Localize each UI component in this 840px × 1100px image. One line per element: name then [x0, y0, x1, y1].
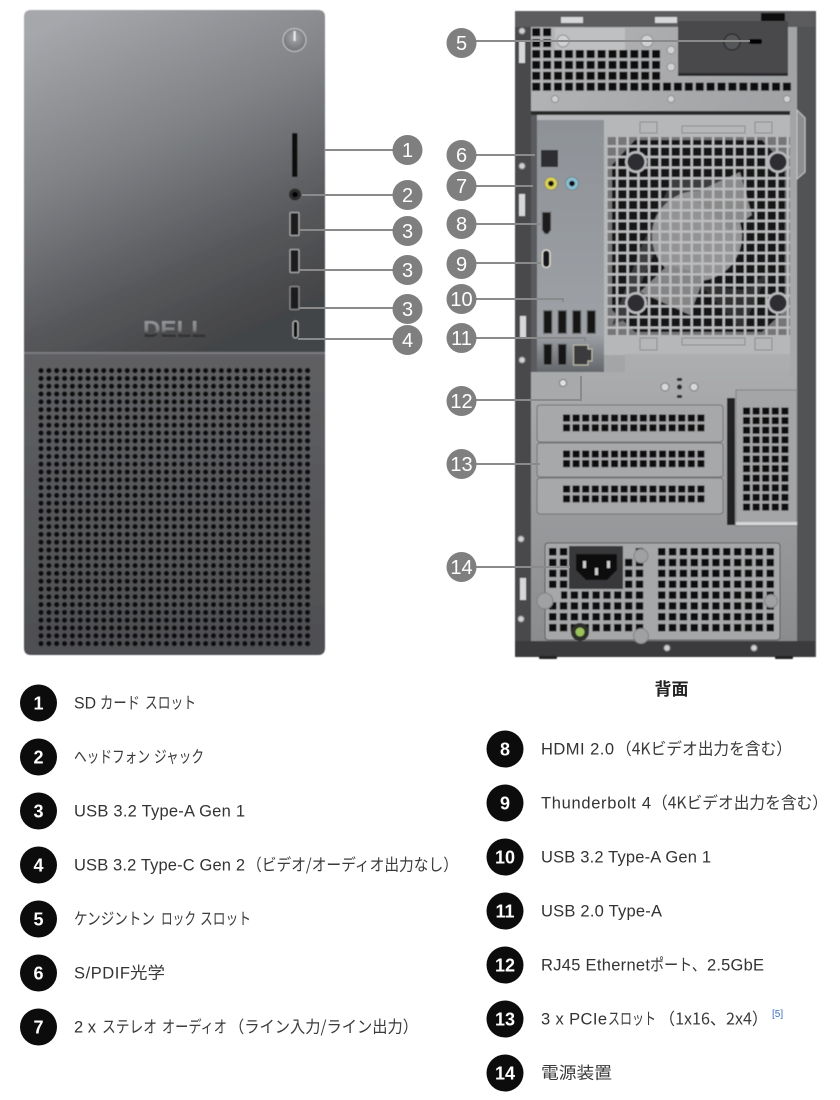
legend item 13: スロット — [608, 1006, 656, 1030]
callout 2 — [392, 180, 422, 210]
callout 13: 13 — [450, 454, 473, 476]
rear fan steel plate — [531, 115, 790, 355]
callout 7 — [446, 171, 476, 201]
callout 6 — [446, 140, 476, 170]
legend item 2: 2 — [33, 748, 44, 768]
legend item 4: （ビデオ/オーディオ出力なし） — [247, 852, 458, 876]
Kensington lock bracket — [678, 13, 788, 76]
callout 2: 2 — [402, 185, 413, 207]
legend item 12: 2.5GbE — [707, 956, 764, 974]
chassis left strip — [515, 11, 531, 657]
chassis bottom strip — [515, 641, 815, 657]
line out audio jack — [544, 177, 558, 190]
USB-A port — [290, 286, 299, 310]
callouts for front view — [298, 135, 422, 355]
line in audio jack — [566, 177, 578, 190]
rear view of desktop tower — [515, 11, 816, 659]
icon: power button — [283, 28, 306, 52]
legend item 6: S/PDIF — [74, 964, 130, 982]
callout 3: 3 — [402, 260, 413, 282]
legend item 8: 8 — [500, 740, 510, 760]
legend item 13 — [486, 1000, 783, 1038]
rear inner opening edge — [531, 111, 790, 115]
chassis right strip — [797, 11, 816, 657]
callout 11: 11 — [451, 328, 472, 350]
USB ports upper row — [544, 310, 596, 334]
S/PDIF port — [541, 150, 558, 167]
legend item 11: 11 — [495, 902, 515, 922]
legend item 12 — [486, 946, 764, 984]
legend item 8: HDMI 2.0 — [541, 740, 614, 758]
legend item 6: 6 — [33, 964, 44, 984]
callout 10 — [446, 284, 476, 314]
callout 1 — [392, 135, 422, 165]
callout 3 — [392, 216, 422, 246]
legend item 9: （4Kビデオ出力を含む） — [652, 790, 828, 814]
callout 12: 12 — [450, 391, 473, 413]
side handle — [797, 110, 805, 179]
chassis feet — [539, 656, 793, 659]
legend item 7 — [20, 1008, 418, 1046]
legend item 10 — [486, 838, 711, 876]
callout 5: 5 — [456, 33, 467, 55]
callout 3 — [392, 294, 422, 324]
power socket — [569, 546, 623, 589]
legend item 1: カード — [100, 690, 140, 714]
legend item 7: 7 — [33, 1018, 44, 1038]
Dell logo: DELL — [143, 316, 206, 342]
callout 4 — [392, 325, 422, 355]
legend item 3: 3 — [33, 802, 44, 822]
callout 3: 3 — [402, 299, 413, 321]
callout 11 — [446, 323, 476, 353]
top strip tabs — [519, 17, 677, 600]
front panel upper section — [24, 10, 325, 353]
legend item 12: 12 — [495, 956, 515, 976]
status LED — [571, 623, 589, 641]
legend item 14: 電源装置 — [541, 1060, 612, 1084]
callout 10: 10 — [450, 289, 473, 311]
callout 3: 3 — [402, 221, 413, 243]
callout 1: 1 — [402, 140, 413, 162]
power supply left vents — [548, 548, 646, 634]
PCIe slot covers — [537, 405, 723, 514]
USB ports lower row — [544, 344, 566, 365]
I/O port panel — [531, 115, 604, 372]
callout 14 — [446, 552, 476, 582]
rear chassis — [515, 11, 816, 657]
callout 14: 14 — [450, 557, 473, 579]
legend item 14 — [486, 1054, 612, 1092]
legend item 2: ジャック — [154, 744, 204, 768]
fan clips — [640, 122, 772, 350]
legend item 13: （1x16、2x4） — [659, 1006, 768, 1030]
callout 8 — [446, 209, 476, 239]
legend item 6 — [20, 954, 165, 992]
legend item 7: （ライン入力/ライン出力） — [229, 1014, 418, 1038]
legend item 1: スロット — [145, 690, 196, 714]
legend item 11 — [486, 892, 662, 930]
side vent — [727, 390, 797, 526]
legend item 5: ロック — [161, 906, 196, 930]
legend item 7: 2 x — [74, 1018, 97, 1036]
legend item 7: オーディオ — [162, 1014, 227, 1038]
RJ45 port — [574, 345, 592, 365]
legend item 10: 10 — [495, 848, 515, 868]
legend item 7: ステレオ — [102, 1014, 157, 1038]
callout 9 — [446, 249, 476, 279]
legend item 13: [5] — [772, 1009, 783, 1020]
Thunderbolt port — [542, 250, 550, 268]
top vent holes — [531, 27, 792, 93]
alignment marks — [661, 378, 698, 398]
legend item 1: 1 — [33, 694, 44, 714]
legend item 9: 9 — [500, 794, 510, 814]
lower chassis plate — [531, 354, 797, 641]
legend item 5: 5 — [33, 910, 44, 930]
HDMI port — [542, 212, 551, 234]
USB-A port — [290, 212, 299, 236]
legend item 4 — [20, 846, 458, 884]
legend item 12: ポート、 — [650, 952, 706, 976]
USB-C port — [293, 321, 298, 338]
headphone jack — [288, 188, 302, 201]
legend item 4: 4 — [33, 856, 44, 876]
legend item 14: 14 — [495, 1064, 515, 1084]
heading: rear: 背面 — [654, 680, 688, 699]
callout 8: 8 — [456, 214, 467, 236]
legend item 12: RJ45 Ethernet — [541, 956, 650, 974]
USB-A port — [290, 250, 299, 272]
fan vent — [607, 137, 790, 335]
legend item 11: USB 2.0 Type-A — [541, 902, 662, 920]
front view of desktop tower — [24, 10, 325, 655]
legend item 1: SD — [74, 694, 96, 712]
legend item 1 — [20, 684, 196, 722]
callout 9: 9 — [456, 254, 467, 276]
legend item 6: 光学 — [130, 960, 165, 984]
legend item 4: USB 3.2 Type-C Gen 2 — [74, 856, 245, 874]
power supply right vents — [658, 548, 777, 634]
PSU screws — [634, 549, 648, 563]
legend item 5: スロット — [200, 906, 251, 930]
callout 4: 4 — [402, 330, 413, 352]
callout 12 — [446, 386, 476, 416]
power supply — [537, 543, 780, 644]
mounting screws — [518, 28, 790, 651]
legend item 5: ケンジントン — [74, 906, 155, 930]
legend item 10: USB 3.2 Type-A Gen 1 — [541, 848, 711, 866]
legend item 13: 13 — [495, 1010, 515, 1030]
callout 13 — [446, 449, 476, 479]
legend item 8 — [486, 730, 792, 768]
legend item 9: Thunderbolt 4 — [541, 794, 651, 812]
legend item 3: USB 3.2 Type-A Gen 1 — [74, 802, 245, 820]
legend item 13: 3 x PCIe — [541, 1010, 607, 1028]
callout 6: 6 — [456, 145, 467, 167]
legend item 2 — [20, 738, 204, 776]
callout 5 — [446, 28, 476, 58]
callouts for rear view — [446, 28, 750, 582]
front grille section — [24, 352, 325, 655]
callout 3 — [392, 255, 422, 285]
chassis top strip — [515, 11, 815, 27]
callout 7: 7 — [456, 176, 467, 198]
legend item 9 — [486, 784, 828, 822]
legend item 3 — [20, 792, 245, 830]
legend item 2: ヘッドフォン — [74, 744, 150, 768]
legend item 5 — [20, 900, 251, 938]
legend item 8: （4Kビデオ出力を含む） — [616, 736, 792, 760]
SD card slot — [292, 133, 298, 177]
